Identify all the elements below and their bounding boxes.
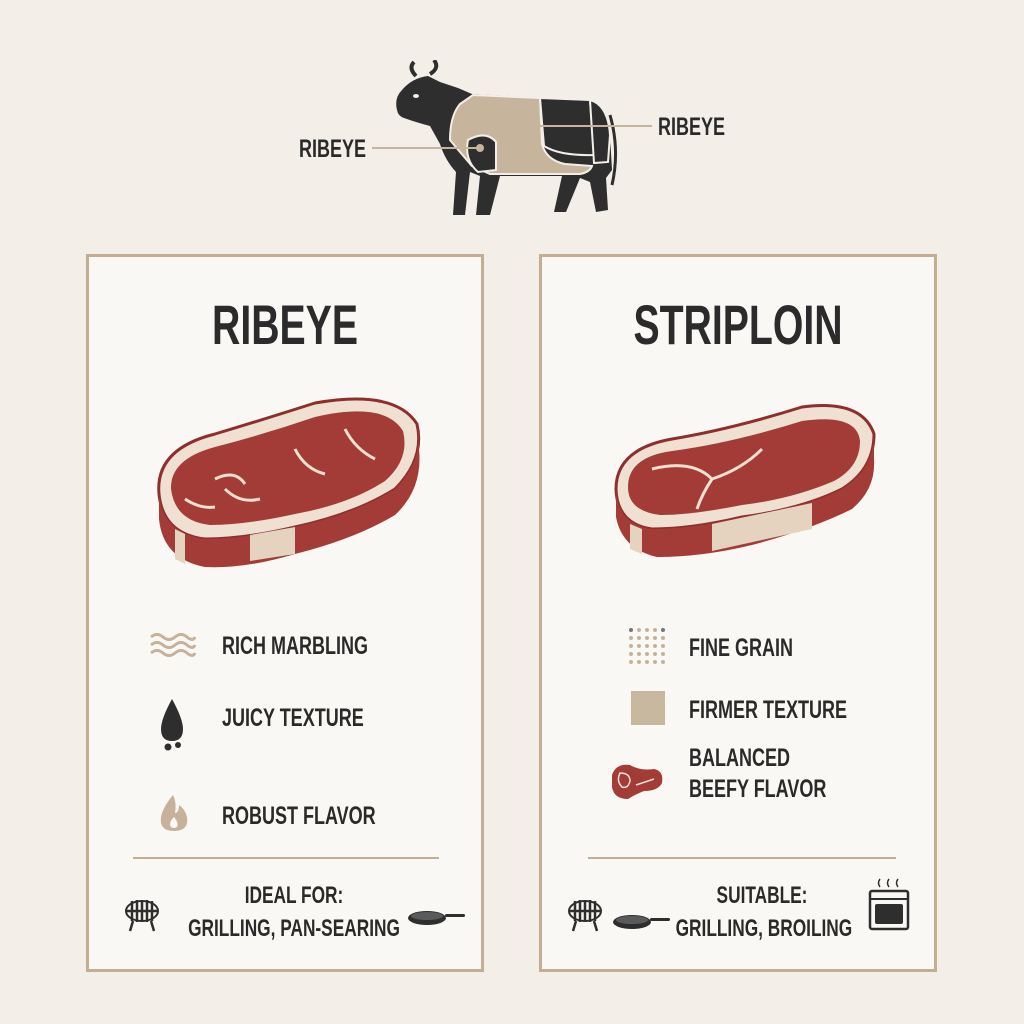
cooking methods ribeye: IDEAL FOR: [245, 882, 343, 909]
feature: balanced beefy flavor: BEEFY FLAVOR [689, 775, 826, 803]
heading striploin: STRIPLOIN [633, 293, 843, 356]
icon: grill [568, 900, 602, 932]
steak illustration ribeye [157, 398, 420, 568]
steak illustration striploin [614, 404, 876, 557]
panel: ribeye [86, 254, 484, 972]
cow diagram [372, 60, 652, 215]
cow label left: RIBEYE [299, 135, 366, 163]
icon: pan [408, 911, 465, 925]
cooking methods ribeye [125, 882, 465, 942]
icon: waves [150, 633, 196, 657]
feature: rich marbling: RICH MARBLING [222, 632, 368, 660]
icon: flame [160, 795, 188, 831]
feature: fine grain [629, 628, 793, 664]
icon: oven [868, 878, 910, 930]
icon: pan [613, 915, 670, 929]
feature: juicy texture [161, 699, 364, 750]
feature: balanced beefy flavor: BALANCED [689, 744, 790, 772]
cooking methods striploin [568, 878, 910, 942]
callout lines [372, 122, 652, 152]
icon: drop [161, 699, 183, 750]
icon: grill [125, 900, 159, 932]
feature: balanced beefy flavor [612, 744, 826, 803]
feature: firmer texture [631, 691, 847, 725]
feature: rich marbling [150, 632, 368, 660]
feature: robust flavor [160, 795, 376, 831]
icon: square [631, 691, 665, 725]
cooking methods striploin: GRILLING, BROILING [676, 915, 852, 942]
cooking methods ribeye: GRILLING, PAN-SEARING [188, 915, 400, 942]
feature: fine grain: FINE GRAIN [689, 634, 793, 662]
feature: firmer texture: FIRMER TEXTURE [689, 696, 847, 724]
icon: dot grid [629, 628, 665, 664]
cooking methods striploin: SUITABLE: [717, 882, 807, 909]
heading ribeye: RIBEYE [212, 293, 358, 356]
icon: steak [612, 764, 662, 799]
panel: striploin [539, 254, 937, 972]
feature: juicy texture: JUICY TEXTURE [222, 704, 364, 732]
cow body [396, 60, 616, 215]
cow label right: RIBEYE [658, 113, 725, 141]
feature: robust flavor: ROBUST FLAVOR [222, 802, 376, 830]
